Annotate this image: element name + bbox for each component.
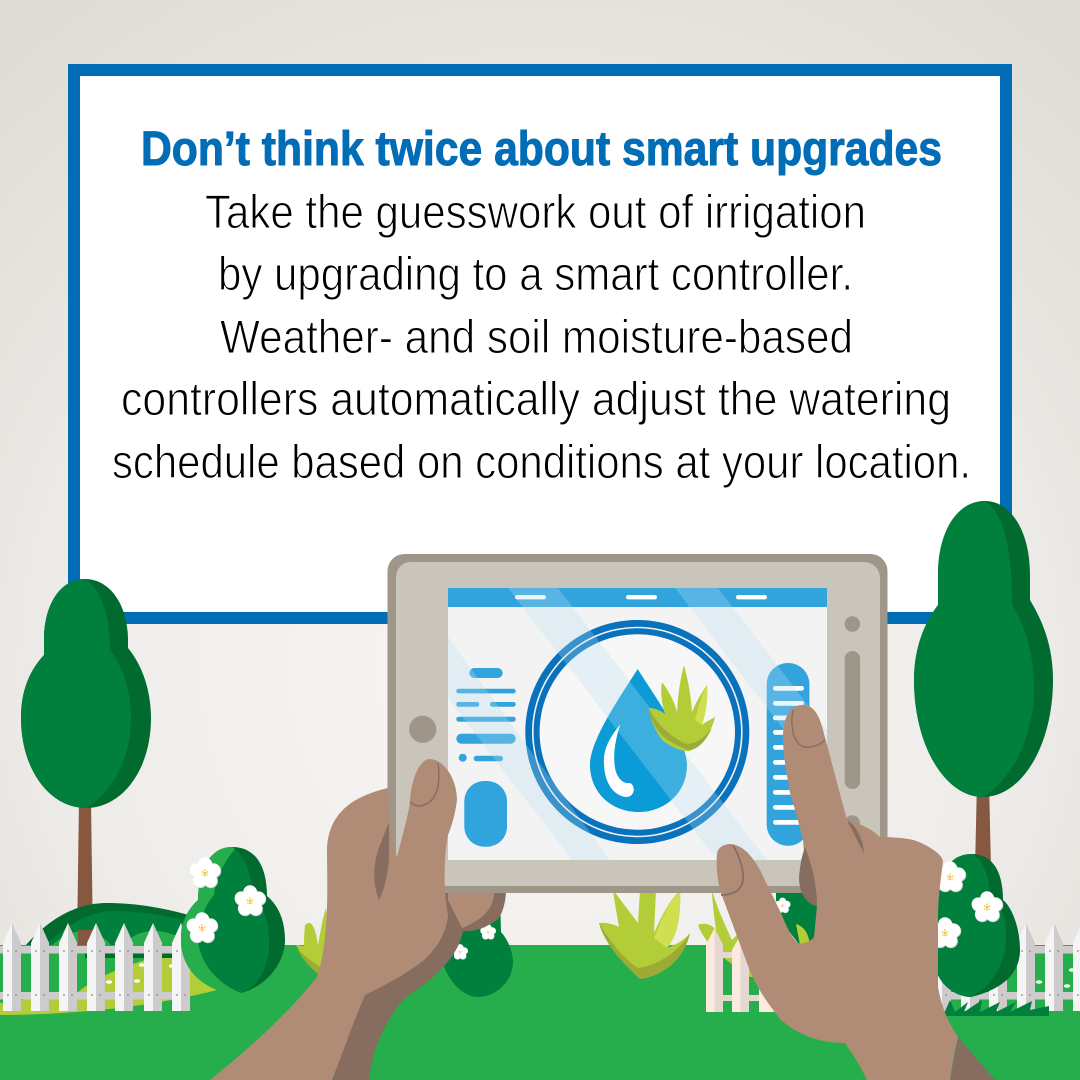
glass reflections	[448, 588, 827, 860]
thumb nail line	[410, 763, 439, 806]
left fence	[0, 923, 190, 1011]
centre grass plant	[599, 890, 690, 979]
right tree	[914, 501, 1053, 870]
finger under tablet	[448, 893, 494, 928]
body text: schedule based on conditions at your location.	[112, 435, 971, 488]
right fence	[933, 923, 1080, 1011]
right grass plant	[698, 890, 778, 978]
finger shadow	[799, 847, 817, 906]
gauge ring	[525, 620, 749, 844]
wrist shadow	[950, 1037, 995, 1080]
back of hand shadow	[332, 900, 463, 1080]
text panel frame	[74, 70, 1006, 618]
fingers behind tablet	[444, 893, 506, 931]
heading: Don’t think twice about smart upgrades	[141, 123, 942, 176]
body text: by upgrading to a smart controller.	[218, 247, 853, 300]
ground	[0, 945, 1080, 1080]
body text: controllers automatically adjust the watering	[121, 372, 951, 425]
right bush	[930, 854, 1020, 997]
left bush	[181, 847, 285, 995]
small grass left	[296, 908, 330, 975]
right slider	[767, 663, 809, 846]
left button	[464, 781, 507, 847]
thumb nail line	[721, 845, 743, 895]
tablet	[388, 554, 888, 893]
left hand	[210, 759, 506, 1080]
grass tufts	[943, 1000, 1049, 1016]
centre fence	[706, 928, 796, 1012]
tablet bezel	[396, 562, 880, 886]
body text: Weather- and soil moisture-based	[220, 310, 853, 363]
screen	[448, 588, 827, 860]
left tree	[21, 579, 151, 946]
right hand	[717, 705, 995, 1080]
lawn patch	[0, 953, 217, 1015]
screen header	[448, 588, 827, 607]
hill	[20, 903, 192, 960]
body text	[112, 185, 971, 488]
index nail line	[792, 710, 825, 747]
centre bush	[440, 895, 513, 997]
side controls	[845, 616, 860, 831]
home button	[409, 716, 436, 743]
water drop	[590, 669, 687, 812]
body text: Take the guesswork out of irrigation	[205, 185, 866, 238]
plant on gauge	[649, 665, 715, 751]
bush behind right hand	[775, 893, 818, 945]
web shadow	[374, 822, 389, 900]
knuckle shadow	[847, 820, 864, 853]
tablet body	[388, 554, 888, 893]
hand and fingers	[717, 705, 958, 1080]
left list	[456, 668, 516, 762]
palm	[210, 759, 457, 1080]
